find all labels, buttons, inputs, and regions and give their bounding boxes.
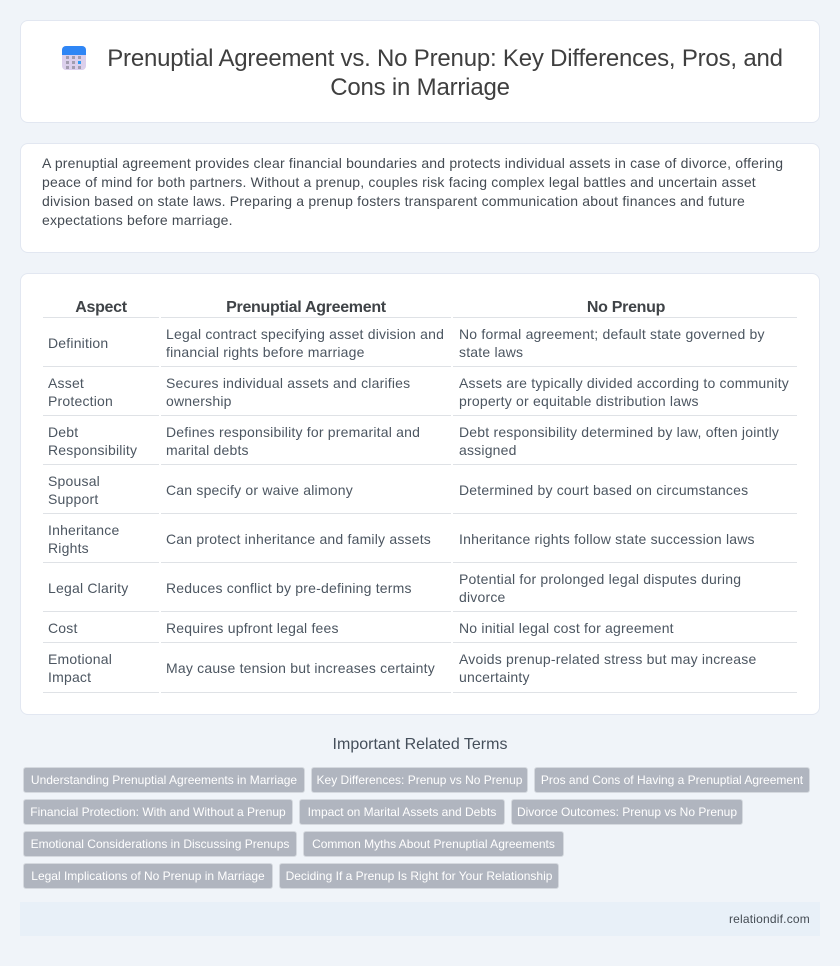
- row: legal clarity: [48, 571, 741, 605]
- related terms chips: Financial Protection: With and Without a Prenup: [30, 805, 286, 819]
- related terms chips: Pros and Cons of Having a Prenuptial Agreement: [541, 773, 803, 787]
- row: legal clarity: divorce: [459, 589, 506, 605]
- title: Prenuptial Agreement vs. No Prenup: Key Differences, Pros, and: [107, 45, 783, 72]
- row: cost: No initial legal cost for agreement: [459, 620, 674, 636]
- row: asset protection: property or equitable distribution laws: [459, 393, 699, 409]
- intro text: expectations before marriage.: [42, 212, 233, 228]
- footer: relationdif.com: [729, 912, 810, 926]
- intro text: A prenuptial agreement provides clear financial boundaries and protects individual assets in case of divorce, offering: [42, 155, 783, 171]
- row: legal clarity: Potential for prolonged legal disputes during: [459, 571, 741, 587]
- row: inheritance rights: Can protect inheritance and family assets: [166, 531, 431, 547]
- related terms chips: Legal Implications of No Prenup in Marriage: [31, 869, 265, 883]
- row: inheritance rights: [48, 522, 755, 556]
- related terms chips: Divorce Outcomes: Prenup vs No Prenup: [517, 805, 737, 819]
- row: definition: [48, 326, 765, 360]
- row: debt responsibility: Debt responsibility determined by law, often jointly: [459, 424, 779, 440]
- row: inheritance rights: Inheritance rights follow state succession laws: [459, 531, 755, 547]
- row: cost: Cost: [48, 620, 78, 636]
- table header: Prenuptial Agreement: [226, 299, 386, 316]
- row: debt responsibility: Defines responsibility for premarital and: [166, 424, 420, 440]
- row: cost: Requires upfront legal fees: [166, 620, 339, 636]
- row: spousal support: Support: [48, 491, 98, 507]
- related terms chips: [23, 767, 810, 889]
- row: emotional impact: Emotional: [48, 651, 112, 667]
- row: inheritance rights: Rights: [48, 540, 89, 556]
- table header: No Prenup: [587, 299, 665, 316]
- related terms chips: Understanding Prenuptial Agreements in Marriage: [31, 773, 297, 787]
- row: legal clarity: Reduces conflict by pre-defining terms: [166, 580, 412, 596]
- related terms heading: Important Related Terms: [333, 736, 507, 753]
- row: emotional impact: [48, 651, 756, 685]
- row: asset protection: Secures individual assets and clarifies: [166, 375, 410, 391]
- related terms chips: Common Myths About Prenuptial Agreements: [312, 837, 555, 851]
- intro text: peace of mind for both partners. Without a prenup, couples risk facing complex legal battles and uncertain asset: [42, 174, 756, 190]
- row: asset protection: Protection: [48, 393, 113, 409]
- row: emotional impact: Avoids prenup-related stress but may increase: [459, 651, 756, 667]
- icon: calendar: [62, 46, 86, 70]
- row: legal clarity: Legal Clarity: [48, 580, 128, 596]
- row: debt responsibility: Responsibility: [48, 442, 137, 458]
- row: spousal support: Determined by court based on circumstances: [459, 482, 748, 498]
- intro panel: [20, 143, 820, 253]
- row: spousal support: [48, 473, 748, 507]
- row: inheritance rights: Inheritance: [48, 522, 119, 538]
- row: definition: Legal contract specifying asset division and: [166, 326, 444, 342]
- related terms chips: Key Differences: Prenup vs No Prenup: [317, 773, 522, 787]
- row: emotional impact: Impact: [48, 669, 91, 685]
- row: cost: [48, 620, 674, 636]
- row: debt responsibility: marital debts: [166, 442, 249, 458]
- row: emotional impact: May cause tension but increases certainty: [166, 660, 435, 676]
- related terms chips: Impact on Marital Assets and Debts: [308, 805, 496, 819]
- row: definition: No formal agreement; default state governed by: [459, 326, 765, 342]
- related terms chips: Deciding If a Prenup Is Right for Your Relationship: [286, 869, 552, 883]
- row: debt responsibility: Debt: [48, 424, 78, 440]
- related terms chips: Emotional Considerations in Discussing Prenups: [31, 837, 289, 851]
- row: debt responsibility: [48, 424, 779, 458]
- row: definition: Definition: [48, 335, 108, 351]
- row: spousal support: Spousal: [48, 473, 100, 489]
- title card: [20, 20, 820, 123]
- row: asset protection: Assets are typically divided according to community: [459, 375, 789, 391]
- table header: [75, 299, 665, 316]
- row: asset protection: [48, 375, 789, 409]
- row: emotional impact: uncertainty: [459, 669, 530, 685]
- row: definition: financial rights before marriage: [166, 344, 365, 360]
- intro text: division based on state laws. Preparing a prenup fosters transparent communication about finances and future: [42, 193, 745, 209]
- table header: Aspect: [75, 299, 127, 316]
- comparison table panel: [20, 273, 820, 715]
- row: asset protection: Asset: [48, 375, 84, 391]
- intro text: [42, 155, 783, 228]
- row: definition: state laws: [459, 344, 523, 360]
- row: debt responsibility: assigned: [459, 442, 517, 458]
- row: asset protection: ownership: [166, 393, 232, 409]
- footer: [20, 902, 820, 936]
- title second line: Cons in Marriage: [330, 74, 510, 101]
- row: spousal support: Can specify or waive alimony: [166, 482, 353, 498]
